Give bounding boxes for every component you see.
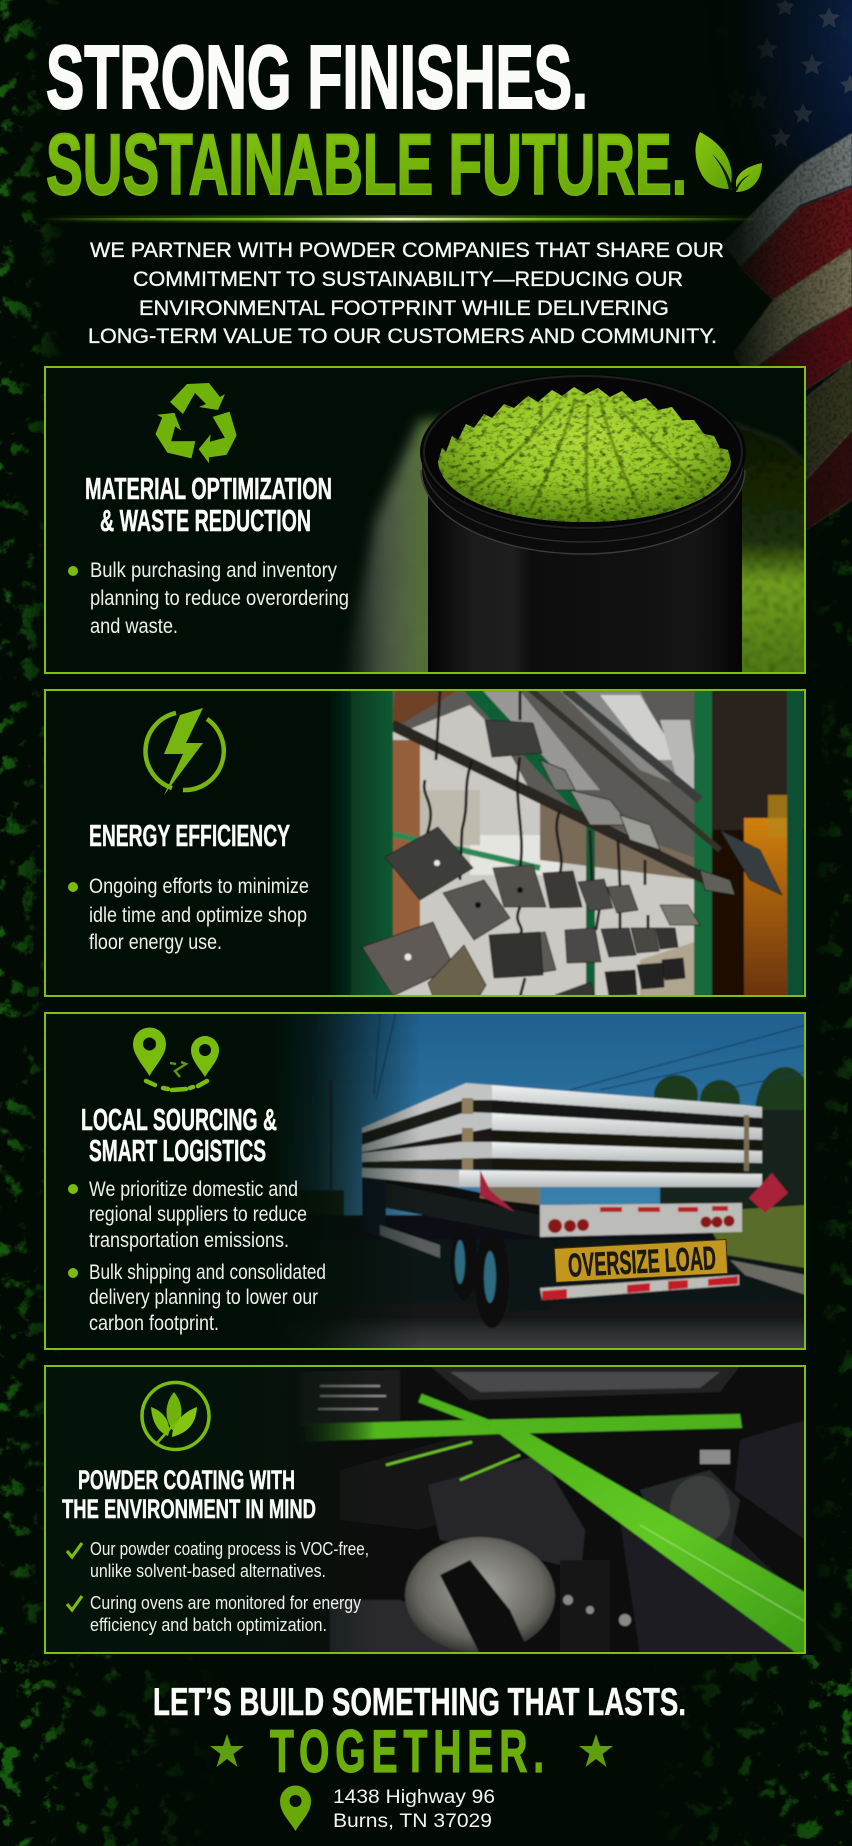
intro text: COMMITMENT TO SUSTAINABILITY—REDUCING OUR	[133, 267, 683, 291]
icon: leaf badge	[142, 1382, 209, 1450]
bullet list: idle time and optimize shop	[89, 904, 307, 927]
intro text: WE PARTNER WITH POWDER COMPANIES THAT SHARE OUR	[90, 238, 724, 262]
icon: recycle	[147, 383, 246, 469]
check list	[67, 1539, 369, 1635]
bullet list: and waste.	[90, 615, 178, 638]
heading: POWDER COATING WITH	[78, 1465, 295, 1495]
trailer	[384, 1179, 676, 1238]
heading: THE ENVIRONMENT IN MIND	[62, 1494, 316, 1524]
icon: stars	[210, 1734, 613, 1767]
bullet list: planning to reduce overordering	[90, 587, 349, 610]
closing headline: TOGETHER.	[270, 1718, 550, 1785]
bullet list: Ongoing efforts to minimize	[89, 875, 309, 898]
wheels	[451, 1224, 555, 1328]
bullet list: delivery planning to lower our	[89, 1286, 318, 1309]
bullet list: Bulk purchasing and inventory	[90, 559, 337, 582]
hooks and chains	[424, 691, 648, 997]
panel: local sourcing	[44, 1012, 815, 1350]
photo: hanging metal parts	[331, 686, 806, 997]
heading: MATERIAL OPTIMIZATION	[85, 472, 332, 506]
heading: & WASTE REDUCTION	[100, 504, 311, 538]
road and grass	[287, 1190, 344, 1216]
photo: oversize load truck	[286, 1014, 804, 1348]
heading	[85, 472, 332, 538]
icon: route pins	[133, 1028, 219, 1090]
panel fade	[46, 691, 346, 995]
bullet list: We prioritize domestic and	[89, 1178, 298, 1201]
bullet list: transportation emissions.	[89, 1229, 289, 1252]
glow divider	[40, 216, 760, 222]
trees	[653, 1066, 804, 1210]
intro text: LONG-TERM VALUE TO OUR CUSTOMERS AND COMMUNITY.	[88, 324, 717, 348]
check list: Our powder coating process is VOC-free,	[90, 1539, 369, 1559]
heading	[62, 1465, 316, 1524]
icon: location pin	[280, 1785, 311, 1831]
panel: energy efficiency	[44, 686, 806, 997]
panel: material optimization	[44, 366, 815, 690]
green strut bars	[295, 1414, 742, 1442]
bullet list: floor energy use.	[89, 931, 222, 954]
hanging plates	[362, 720, 782, 997]
throttle body	[405, 1537, 555, 1653]
bullet list: carbon footprint.	[89, 1312, 219, 1335]
heading: LOCAL SOURCING &	[81, 1103, 277, 1137]
check list: Curing ovens are monitored for energy	[90, 1593, 361, 1613]
heading: ENERGY EFFICIENCY	[89, 819, 290, 853]
title	[46, 28, 687, 213]
panel fade	[46, 1367, 376, 1652]
icon: lightning bolt	[146, 708, 224, 795]
closing headline	[153, 1681, 686, 1785]
address: 1438 Highway 96	[333, 1786, 495, 1808]
bullet list	[68, 559, 349, 638]
american flag backdrop	[724, 0, 852, 530]
address: Burns, TN 37029	[333, 1810, 492, 1832]
check list: unlike solvent-based alternatives.	[90, 1561, 326, 1581]
bullet list: regional suppliers to reduce	[89, 1203, 307, 1226]
panel fade	[46, 1014, 421, 1348]
icon: leaves	[695, 132, 762, 192]
bullet list	[68, 875, 309, 954]
bullet list	[68, 1178, 326, 1335]
intro text: ENVIRONMENTAL FOOTPRINT WHILE DELIVERING	[139, 296, 669, 320]
heading: SMART LOGISTICS	[89, 1134, 266, 1168]
heading	[81, 1103, 277, 1168]
powder mound	[438, 387, 731, 522]
flag stars	[756, 0, 852, 147]
panel: powder coating	[44, 1365, 806, 1654]
photo: powder jar	[340, 374, 815, 690]
oversize sign: OVERSIZE LOAD	[567, 1239, 717, 1284]
intro text	[88, 238, 724, 348]
photo: engine bay	[300, 1367, 804, 1652]
address	[280, 1785, 495, 1832]
panel fade	[46, 368, 376, 672]
check list: efficiency and batch optimization.	[90, 1615, 327, 1635]
stacked beams	[362, 1083, 762, 1187]
bullet list: Bulk shipping and consolidated	[89, 1261, 326, 1284]
oversize sign	[554, 1238, 728, 1284]
